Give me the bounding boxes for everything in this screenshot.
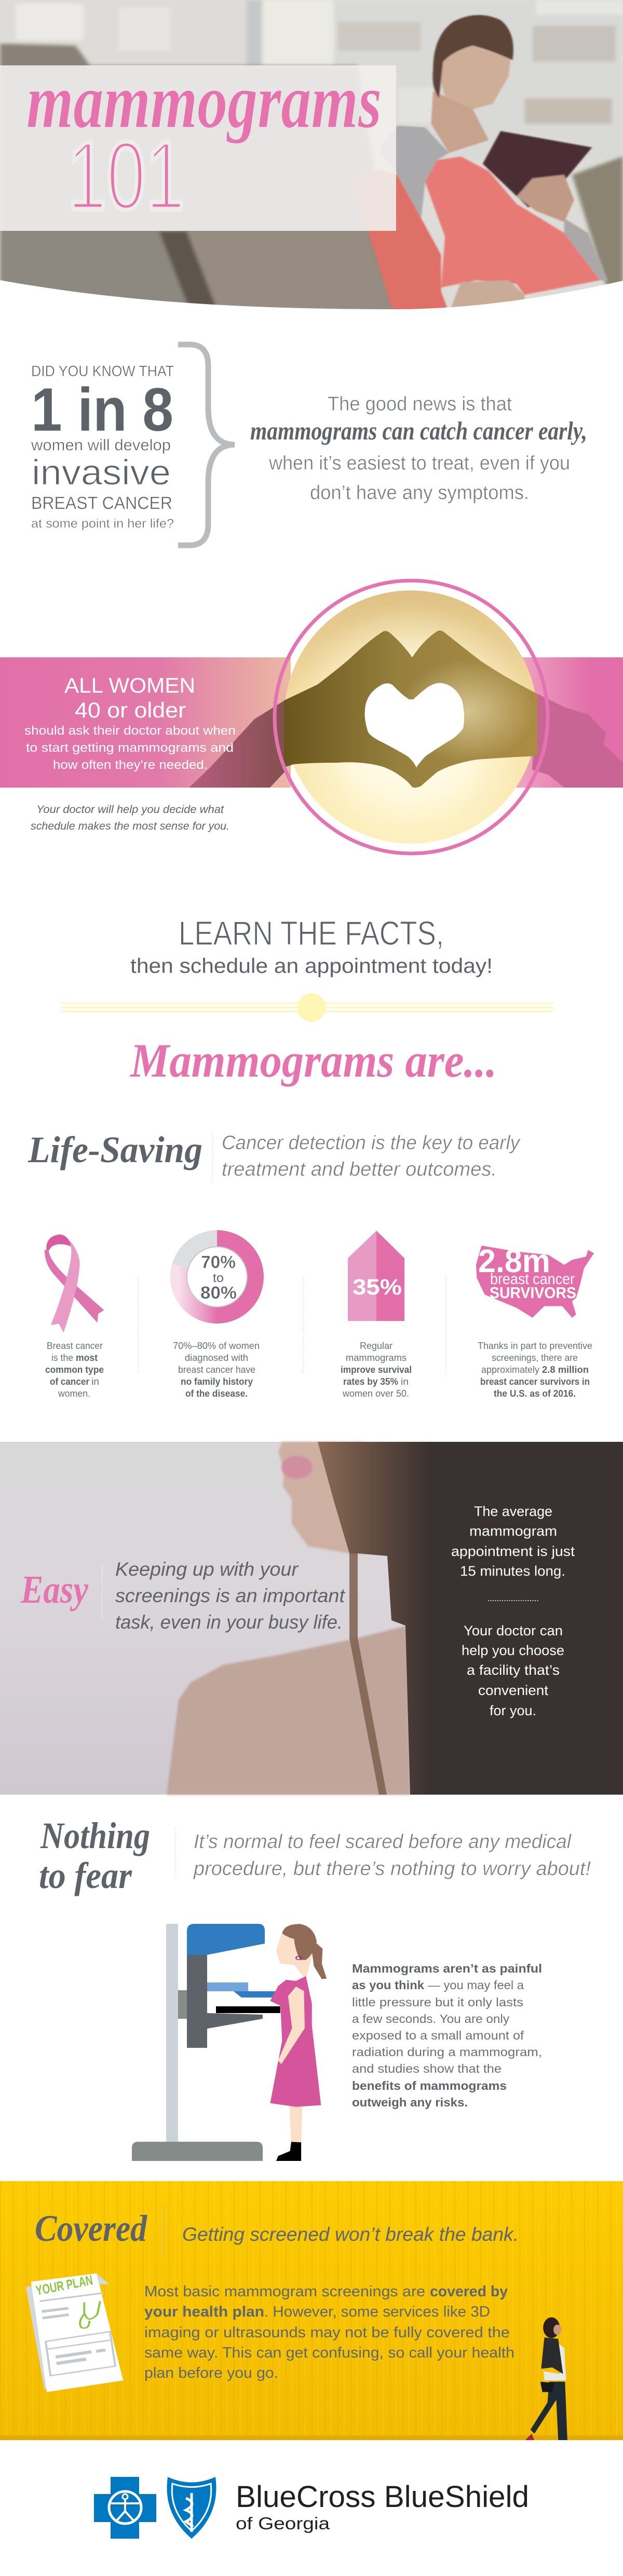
text block: stat family history: diagnosed with <box>185 1353 248 1363</box>
text block: not as painful: as you think <box>352 1978 424 1992</box>
text block: stat survival: rates by 35% <box>343 1376 398 1387</box>
text block: all women <box>24 673 236 772</box>
panel: all women band <box>0 657 623 788</box>
photo: face and neck <box>278 1442 363 1553</box>
text block: all women: ALL WOMEN <box>64 673 195 697</box>
text block: not as painful: benefits of mammograms <box>352 2079 507 2092</box>
heart light <box>365 683 464 767</box>
text block: stat survivors: Thanks in part to preventive <box>478 1341 592 1351</box>
text block: easy facts: help you choose <box>462 1643 564 1658</box>
photo: right arm <box>532 694 623 788</box>
text block: not as painful: and studies show that the <box>352 2062 502 2075</box>
section heading: nothing to fear: procedure, but there’s nothing to worry about! <box>193 1858 591 1880</box>
text block: all women: how often they’re needed. <box>53 758 208 772</box>
photo: walking woman <box>525 2317 567 2440</box>
text block: not as painful: a few seconds. You are only <box>352 2012 510 2026</box>
text block: good news: don’t have any symptoms. <box>310 482 529 504</box>
text block: stat survivors: approximately <box>481 1365 539 1375</box>
text block: stat most common: common type <box>45 1365 104 1375</box>
chart: donut 70 to 80 percent: to <box>213 1271 224 1285</box>
text block: stat most common: Breast cancer <box>47 1341 103 1351</box>
text block: not as painful: little pressure but it only lasts <box>352 1995 523 2009</box>
photo: hair <box>318 1442 428 1795</box>
text block: stat most common: women. <box>58 1388 90 1399</box>
text block: covered details: imaging or ultrasounds may not be fully covered the <box>144 2324 510 2341</box>
text block: covered details: your health plan <box>144 2304 264 2320</box>
text block: not as painful: radiation during a mammogram, <box>352 2045 542 2059</box>
hands silhouette <box>284 630 537 788</box>
logo: wordmark <box>236 2480 529 2533</box>
text block: not as painful: exposed to a small amount of <box>352 2029 524 2042</box>
text block: stat survivors: 2.8 million <box>542 1365 589 1375</box>
text block: stat most common <box>45 1341 104 1399</box>
icon: usa map survivors: breast cancer <box>490 1271 575 1288</box>
text block: stat survivors <box>478 1341 592 1399</box>
icon: usa map survivors <box>476 1243 594 1318</box>
text block: stat survival <box>341 1341 412 1399</box>
text block: easy facts: The average <box>474 1504 552 1519</box>
title <box>26 58 382 230</box>
text block: stat survivors: screenings, there are <box>492 1353 578 1363</box>
text block: 1 in 8 statistic: women will develop <box>31 436 171 454</box>
text block: stat family history: breast cancer have <box>178 1365 255 1375</box>
section heading: nothing to fear: Nothing <box>40 1815 150 1856</box>
text block: 1 in 8 statistic: 1 in 8 <box>31 376 173 444</box>
panel: hero photo <box>0 0 623 332</box>
text block: stat family history: 70%–80% of women <box>173 1341 260 1351</box>
section heading: nothing to fear: to fear <box>39 1855 132 1896</box>
section heading: easy <box>20 1559 346 1633</box>
text block: covered details: . However, some services like 3D <box>264 2304 490 2320</box>
photo: lips <box>281 1456 313 1479</box>
section heading: covered <box>35 2207 519 2258</box>
photo: blurred window background <box>16 0 623 160</box>
text block: good news <box>250 393 587 504</box>
text block: doctor note: Your doctor will help you decide what <box>36 804 224 816</box>
text block: stat most common: is the <box>51 1353 73 1363</box>
panel: covered yellow wall <box>0 2181 623 2440</box>
section heading: easy: Easy <box>20 1568 88 1611</box>
text block: not as painful: outweigh any risks. <box>352 2096 468 2109</box>
text block: easy facts: a facility that’s <box>467 1662 560 1678</box>
section heading: covered: Getting screened won’t break the bank. <box>182 2224 519 2245</box>
text block: 1 in 8 statistic <box>31 363 174 531</box>
text block: good news: The good news is that <box>328 393 512 415</box>
text block: 1 in 8 statistic: DID YOU KNOW THAT <box>31 363 174 380</box>
logo: wordmark: BlueCross BlueShield <box>236 2480 529 2514</box>
icon: pink ribbon <box>45 1234 104 1333</box>
text block: doctor note <box>31 804 229 832</box>
icon: curly brace <box>178 345 235 545</box>
chart: donut 70 to 80 percent: 70% <box>201 1252 236 1272</box>
text block: all women: to start getting mammograms and <box>26 741 234 755</box>
section heading: life-saving: Cancer detection is the key to early <box>222 1132 521 1154</box>
text block: stat most common: most <box>76 1353 98 1363</box>
hand highlight <box>400 659 535 763</box>
logo: wordmark: of Georgia <box>236 2514 330 2533</box>
section heading: nothing to fear <box>39 1815 591 1896</box>
illustration: mammogram machine <box>132 1924 280 2161</box>
text block: stat survival: women over 50. <box>342 1388 409 1399</box>
logo: blue shield <box>167 2477 216 2539</box>
photo: loose hair strand <box>349 1553 387 1795</box>
text block: stat family history: of the disease. <box>185 1388 248 1399</box>
section heading: easy: Keeping up with your <box>115 1559 299 1580</box>
text block: good news: when it’s easiest to treat, even if you <box>268 452 570 474</box>
text block: stat most common: in <box>91 1376 99 1387</box>
text block: easy facts: Your doctor can <box>464 1623 563 1638</box>
text block: 1 in 8 statistic: BREAST CANCER <box>31 493 172 513</box>
text block: easy facts: 15 minutes long. <box>460 1563 565 1579</box>
text block: covered details <box>144 2283 514 2381</box>
heading: learn the facts: then schedule an appointment today! <box>130 955 493 977</box>
panel: easy photo <box>0 1442 623 1795</box>
text block: covered details: Most basic mammogram screenings are <box>144 2283 425 2300</box>
text block: covered details: same way. This can get confusing, so call your health <box>144 2345 514 2361</box>
section heading: easy: screenings is an important <box>115 1585 346 1606</box>
photo: sofa <box>0 44 623 313</box>
photo: shoulder <box>167 1626 410 1795</box>
icon: usa map survivors: 2.8m <box>478 1243 550 1279</box>
curved white edge <box>0 280 623 332</box>
heading: learn the facts <box>130 914 493 977</box>
section heading: life-saving: Life-Saving <box>28 1129 202 1170</box>
text block: easy facts <box>451 1504 575 1718</box>
text block: 1 in 8 statistic: invasive <box>32 452 171 492</box>
text block: stat survival: mammograms <box>346 1353 407 1363</box>
text block: stat most common: of cancer <box>50 1376 89 1387</box>
logo: blue cross <box>94 2477 156 2539</box>
photo: sun and heart hands circle <box>275 581 548 853</box>
heading: learn the facts: LEARN THE FACTS, <box>179 914 444 952</box>
icon: up arrow 35 percent: 35% <box>353 1275 402 1300</box>
title: mammograms <box>26 58 382 144</box>
icon: usa map survivors: SURVIVORS <box>490 1284 576 1302</box>
photo: left arm <box>189 700 285 788</box>
text block: easy facts: mammogram <box>469 1523 557 1539</box>
text block: 1 in 8 statistic: at some point in her life? <box>31 517 174 531</box>
text block: all women: 40 or older <box>75 698 186 722</box>
chart: donut 70 to 80 percent: 80% <box>200 1283 237 1303</box>
section heading: covered: Covered <box>35 2208 147 2249</box>
translucent title panel <box>0 65 396 231</box>
text block: all women: should ask their doctor about when <box>24 724 236 738</box>
text block: stat survival: improve survival <box>341 1365 412 1375</box>
text block: stat survival: in <box>401 1376 409 1387</box>
text block: easy facts: convenient <box>478 1683 549 1698</box>
text block: doctor note: schedule makes the most sense for you. <box>31 820 229 832</box>
text block: covered details: plan before you go. <box>144 2365 278 2381</box>
title: 101 <box>67 121 185 230</box>
text block: stat survival: Regular <box>360 1341 392 1351</box>
heading: mammograms are: Mammograms are... <box>129 1034 497 1087</box>
section heading: life-saving <box>28 1129 521 1183</box>
illustration: woman in pink dress <box>270 1924 327 2161</box>
section heading: easy: task, even in your busy life. <box>115 1611 343 1633</box>
text block: not as painful: Mammograms aren’t as painful <box>352 1962 542 1975</box>
divider with circle <box>62 993 553 1022</box>
text block: stat survivors: breast cancer survivors in <box>480 1376 590 1387</box>
text block: easy facts: appointment is just <box>451 1544 575 1559</box>
ring <box>275 581 548 853</box>
icon: your plan document: YOUR PLAN <box>34 2272 94 2298</box>
text block: stat family history <box>173 1341 260 1399</box>
photo: woman with tablet <box>351 15 608 313</box>
text block: stat family history: no family history <box>181 1376 253 1387</box>
text block: not as painful: — you may feel a <box>428 1978 524 1992</box>
text block: easy facts: for you. <box>490 1703 536 1718</box>
text block: not as painful <box>352 1962 542 2109</box>
section heading: nothing to fear: It’s normal to feel scared before any medical <box>194 1831 572 1853</box>
text block: covered details: covered by <box>430 2283 508 2300</box>
icon: your plan document <box>26 2272 123 2392</box>
chart: donut 70 to 80 percent <box>179 1238 255 1315</box>
section heading: life-saving: treatment and better outcomes. <box>222 1159 497 1180</box>
text block: stat survivors: the U.S. as of 2016. <box>494 1388 576 1399</box>
icon: up arrow 35 percent <box>348 1231 404 1321</box>
